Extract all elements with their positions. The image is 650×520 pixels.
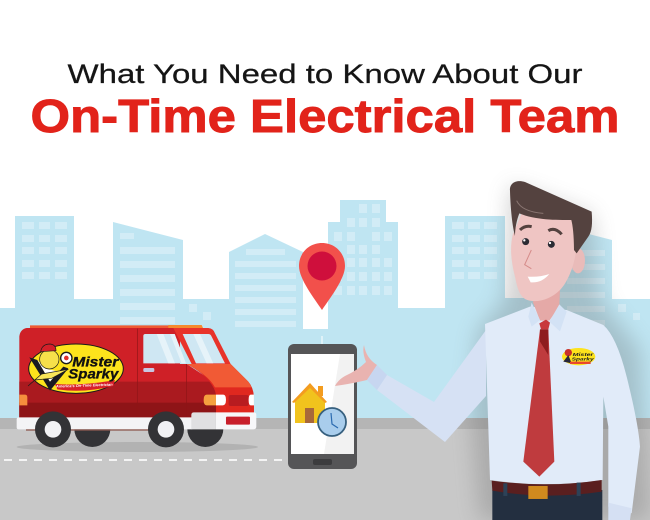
pointing arm [335,330,486,442]
man [485,181,640,520]
collar [528,303,567,331]
icon: clock [318,408,346,436]
phone connector [322,336,323,344]
nose [525,250,531,269]
cuff [608,503,632,520]
tie [523,320,554,477]
title: What You Need to Know About Our [68,59,582,89]
eyebrows [520,226,562,234]
front wheels [35,411,184,447]
van body [19,325,254,418]
van windows [143,334,225,372]
smile [528,274,549,282]
cuff [367,365,387,390]
shirt [485,307,640,513]
title: On-Time Electrical Team [30,90,620,142]
city skyline [0,200,650,420]
logo: Mister Sparky [28,344,123,393]
title [30,59,620,142]
location pin [299,243,345,310]
sleeve [377,330,486,442]
eyes [522,238,529,245]
shirt logo: Mister [573,352,595,357]
phone [288,344,357,469]
logo: Mister Sparky: Mister [72,353,120,369]
man shadow [470,185,650,520]
hand [335,345,377,386]
road [0,418,650,520]
head [510,181,592,301]
van [17,325,258,452]
trousers [492,490,602,520]
shirt logo: Sparky [572,357,594,362]
icon: house [292,383,327,423]
shirt logo [562,348,595,365]
rear wheels [74,411,223,447]
neck [533,290,560,321]
van lights [19,395,254,405]
van bumper [17,412,256,431]
logo: Mister Sparky: Sparky [68,366,120,382]
logo: Mister Sparky: America's On-Time Electrician [55,383,113,389]
van shadow [17,442,258,452]
belt [492,480,602,499]
